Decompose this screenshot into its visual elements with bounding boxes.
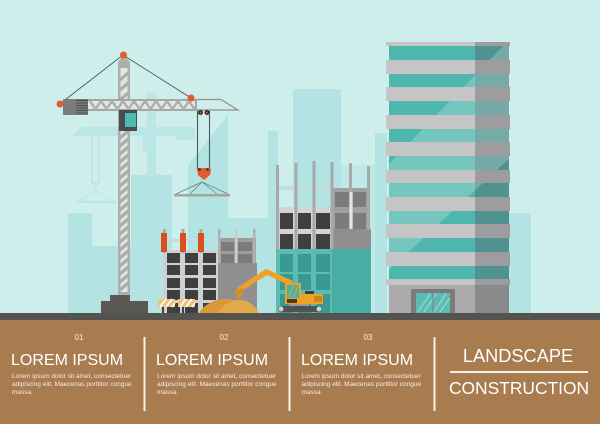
column 01: 01 — [75, 333, 84, 342]
column 02: LOREM IPSUM — [156, 352, 268, 369]
left building under construction — [161, 229, 257, 313]
column 01: Lorem ipsum dolor sit amet, consectetuer — [12, 373, 132, 380]
background crane — [72, 92, 195, 203]
excavator body — [300, 294, 323, 304]
dirt mounds — [199, 299, 259, 313]
crane mast — [118, 55, 130, 295]
crane joints — [56, 52, 194, 108]
crane jib — [88, 99, 238, 111]
column 02 — [156, 333, 277, 396]
title: CONSTRUCTION — [449, 378, 589, 398]
column 03: LOREM IPSUM — [301, 352, 413, 369]
column 02: massa. — [157, 389, 178, 396]
middle building under construction — [276, 161, 371, 313]
column 03: Lorem ipsum dolor sit amet, consectetuer — [302, 373, 422, 380]
tower reflection — [389, 44, 510, 270]
column 03: massa. — [302, 389, 323, 396]
crane hook — [174, 110, 230, 196]
column 01: massa. — [12, 389, 33, 396]
office tower — [386, 42, 510, 313]
column 03: adipiscing elit. Maecenas porttitor congue — [302, 381, 421, 388]
excavator — [235, 269, 323, 312]
right gray wing — [218, 229, 257, 313]
info panel — [0, 320, 600, 424]
background skyline — [68, 89, 531, 313]
crane cables — [61, 55, 191, 103]
column 01: LOREM IPSUM — [11, 352, 123, 369]
tower ground floor — [389, 285, 509, 313]
column 01: adipiscing elit. Maecenas porttitor congue — [12, 381, 132, 388]
column 03 — [301, 333, 422, 396]
tower glass floors — [389, 46, 475, 286]
title — [449, 346, 589, 398]
column 01 — [11, 333, 132, 396]
column 03: 03 — [364, 333, 373, 342]
crane base — [101, 295, 148, 314]
crane cab — [119, 110, 137, 131]
column 02: 02 — [220, 333, 229, 342]
divider — [434, 337, 436, 411]
divider — [288, 337, 290, 411]
teal lower floors — [276, 249, 371, 313]
divider — [144, 337, 146, 411]
excavator arm — [237, 269, 293, 292]
ground — [0, 313, 600, 320]
tower crane — [56, 52, 238, 314]
barriers — [158, 299, 195, 313]
tower floor slabs — [386, 42, 510, 285]
title: LANDSCAPE — [463, 346, 573, 366]
column 02: adipiscing elit. Maecenas porttitor congue — [157, 381, 277, 388]
column 02: Lorem ipsum dolor sit amet, consectetuer — [157, 373, 277, 380]
counterweight — [63, 99, 88, 115]
excavator tracks — [278, 306, 322, 312]
